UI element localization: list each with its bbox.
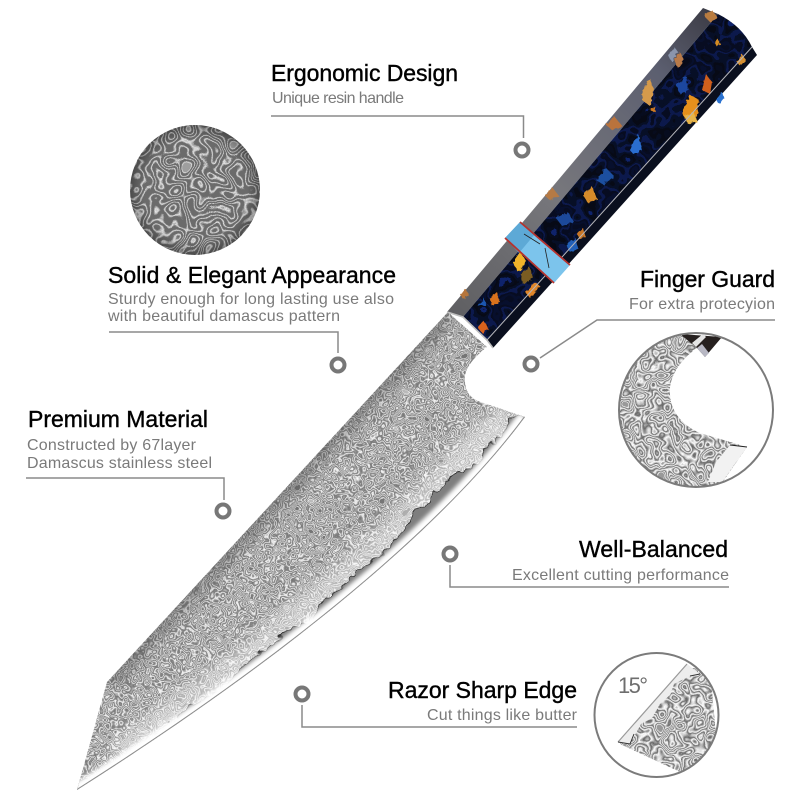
heading: Well-Balanced [579,536,728,562]
description: Excellent cutting performance [512,567,729,584]
heading: Premium Material [28,406,208,432]
callout: finger guard [524,266,775,370]
heading: Ergonomic Design [271,60,458,86]
callout: razor sharp edge [296,677,578,727]
callout: solid and elegant appearance [107,262,396,372]
leader line [109,332,338,353]
description: Unique resin handle [272,90,404,107]
description: Constructed by 67layer [27,437,197,454]
marker ring [444,548,456,560]
handle [447,8,760,348]
edge angle detail circle [594,653,720,780]
handle main resin facet [455,8,760,348]
resin flakes [460,10,746,333]
leader line [271,116,524,138]
damascus pattern circle [128,123,262,257]
callout: well-balanced [444,536,729,587]
handle gray facet [447,8,718,317]
blade [77,312,525,790]
description: Cut things like butter [427,707,578,724]
leader line [540,320,775,358]
band shade [505,222,535,253]
angle label: 15° [618,673,648,698]
blade cutting edge zone [60,415,540,800]
finger guard blade crop [620,334,748,486]
marker ring [296,688,308,700]
marker ring [524,358,538,370]
leader line [302,705,577,727]
red spacers [505,222,570,283]
callout: premium material [26,406,230,518]
leader line [26,478,224,500]
description: with beautiful damascus pattern [107,308,340,325]
handle lower facet [487,47,757,348]
marker ring [216,504,230,518]
finger guard detail circle [615,330,773,490]
description [27,437,212,472]
silver collar [447,312,493,348]
marker ring [516,144,528,156]
callout: ergonomic design [271,60,528,156]
edge highlight [77,417,525,790]
description [107,291,394,325]
description: Sturdy enough for long lasting use also [108,291,394,308]
description: Damascus stainless steel [27,455,212,472]
description: For extra protecyion [629,296,775,313]
leader line [450,565,729,587]
marker ring [332,358,344,372]
heading: Razor Sharp Edge [388,677,577,703]
edge blade crop [618,664,716,772]
turquoise band [505,222,570,283]
handle ridge [487,47,752,340]
heading: Solid & Elegant Appearance [108,262,396,288]
heading: Finger Guard [640,266,775,292]
